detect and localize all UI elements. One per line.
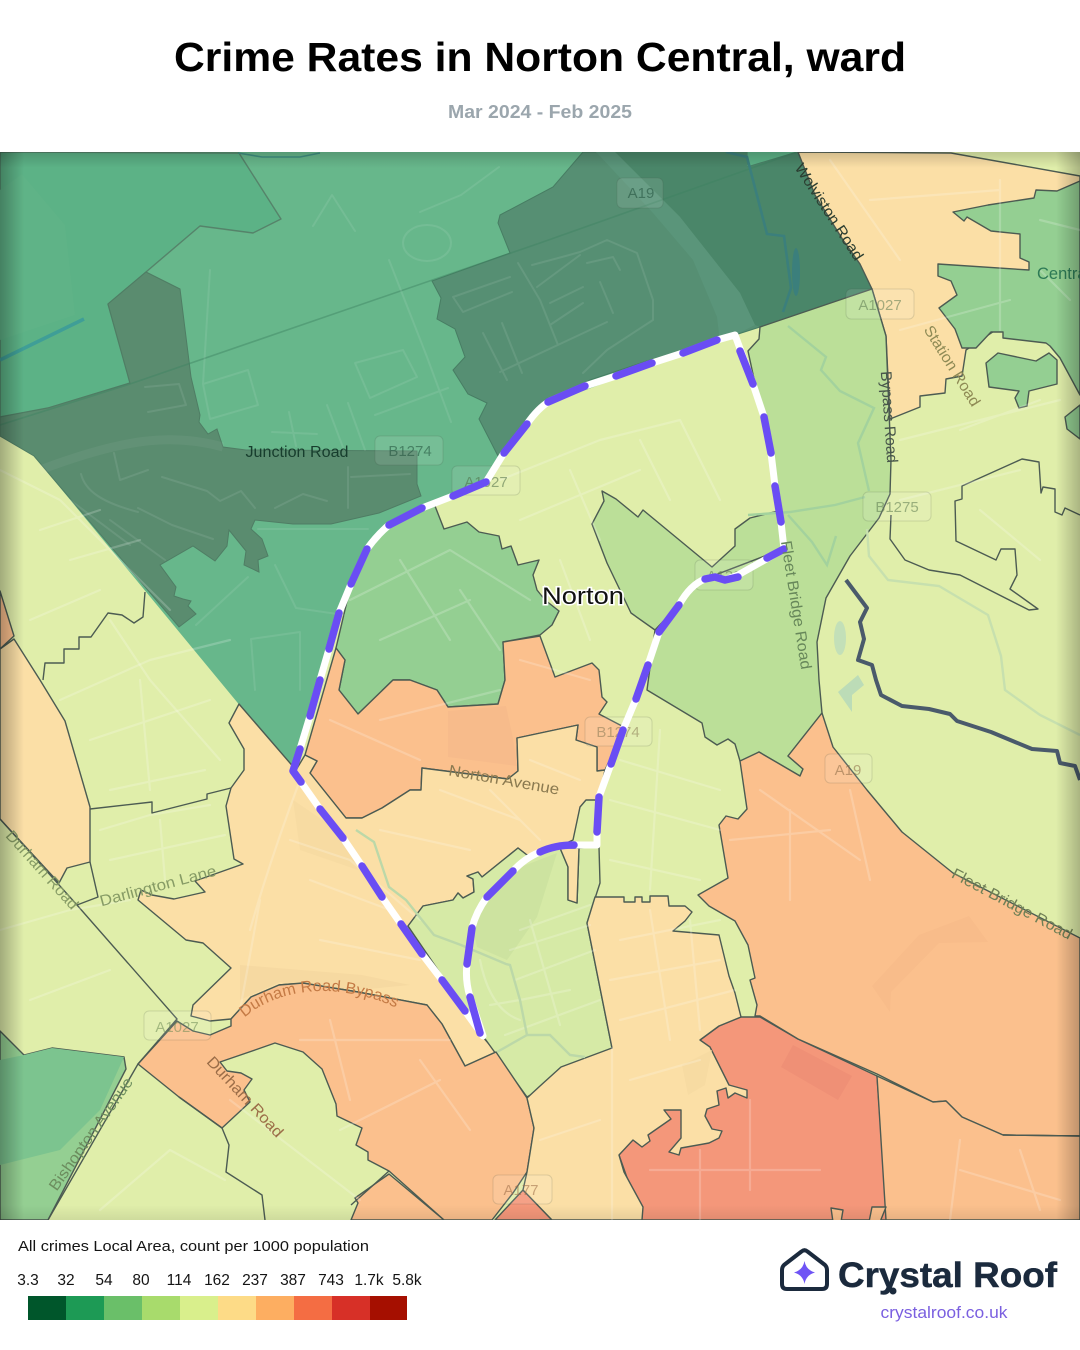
legend values: 80 bbox=[132, 1272, 150, 1289]
map edge shading bbox=[0, 152, 1080, 1220]
place label: Norton: Norton bbox=[542, 583, 624, 610]
region: pale green east of ward bbox=[647, 289, 891, 776]
legend values: 114 bbox=[167, 1272, 192, 1289]
legend colour scale bbox=[28, 1296, 407, 1320]
legend values: 387 bbox=[280, 1272, 306, 1289]
stream and pond north bbox=[0, 152, 800, 360]
legend values: 237 bbox=[242, 1272, 268, 1289]
road name labels: Bishopton Avenue bbox=[46, 1075, 137, 1194]
region: yellow west edge bbox=[0, 639, 90, 883]
road network bbox=[0, 160, 1080, 1220]
region: light green island bbox=[986, 353, 1057, 408]
region: yellow central south bbox=[138, 704, 605, 1066]
legend values: 743 bbox=[318, 1272, 344, 1289]
road name labels: Junction Road bbox=[246, 444, 348, 461]
region: light green north-east bbox=[938, 181, 1080, 395]
road shields: A1027 bbox=[464, 474, 508, 491]
legend values: 54 bbox=[95, 1272, 113, 1289]
logo wordmark: Crystal Roof bbox=[838, 1256, 1057, 1295]
red notches at map bottom bbox=[831, 1208, 843, 1222]
ward boundary: white line bbox=[293, 335, 784, 1036]
road name labels bbox=[6, 162, 1080, 1190]
region: red A177 bbox=[495, 1190, 552, 1220]
region outlines on base bbox=[0, 459, 1080, 1220]
road name labels: Wolviston Road bbox=[791, 161, 866, 264]
road name labels: Darlington Lane bbox=[98, 863, 218, 910]
region: pale green inside ward bbox=[592, 491, 783, 630]
ward boundary: purple dashes bbox=[293, 340, 784, 1033]
region: orange central ward bbox=[305, 636, 622, 818]
road shields: A19 bbox=[835, 762, 861, 779]
road name labels: Durham Road Bypass bbox=[238, 980, 398, 1016]
river bbox=[846, 580, 1080, 780]
road name labels: Station Road bbox=[920, 323, 983, 410]
road shields: A177 bbox=[503, 1182, 539, 1199]
road shields: B1275 bbox=[875, 499, 919, 516]
road name labels: Bypass Road bbox=[877, 371, 900, 464]
region: orange Durham Road Bypass bbox=[138, 983, 534, 1220]
legend title: All crimes Local Area, count per 1000 population bbox=[18, 1238, 369, 1255]
region: green north-west bbox=[22, 152, 626, 764]
region: green south-west bbox=[0, 1031, 126, 1220]
region: dark green north bbox=[432, 152, 803, 456]
region: orange south-east bbox=[698, 713, 1080, 1136]
region: green far north-west bbox=[0, 152, 281, 417]
logo descender dot bbox=[890, 1288, 896, 1294]
legend values: 162 bbox=[204, 1272, 230, 1289]
region: yellow north-east bbox=[798, 152, 1080, 419]
road shields: A19 bbox=[628, 185, 654, 202]
region: yellow south bbox=[523, 896, 747, 1220]
legend values: 3.3 bbox=[17, 1272, 39, 1289]
streams and ponds bbox=[356, 326, 1080, 1057]
region: orange west edge bbox=[0, 591, 14, 649]
legend bbox=[17, 1238, 422, 1320]
road name labels: Fleet Bridge Road bbox=[949, 865, 1075, 943]
road name labels: Durham Road bbox=[203, 1054, 286, 1141]
road shields: B1274 bbox=[596, 724, 640, 741]
yellow sliver in ward south bbox=[560, 848, 579, 903]
region: light green ward pocket bbox=[336, 505, 559, 714]
logo url: crystalroof.co.uk bbox=[880, 1304, 1008, 1322]
A19 road band bbox=[596, 152, 616, 153]
road name labels: Norton Avenue bbox=[447, 762, 561, 799]
icon: house with star bbox=[782, 1250, 827, 1289]
road shields bbox=[144, 178, 931, 1204]
title: Crime Rates in Norton Central, ward bbox=[174, 34, 906, 80]
logo: Crystal Roof bbox=[782, 1250, 1057, 1322]
road name labels: Fleet Bridge Road bbox=[777, 540, 814, 671]
legend values: 32 bbox=[57, 1272, 75, 1289]
legend values: 5.8k bbox=[392, 1272, 422, 1289]
road shields: A1027 bbox=[858, 297, 902, 314]
legend values: 1.7k bbox=[354, 1272, 384, 1289]
region: pale green ward south bbox=[408, 847, 612, 1097]
subtitle: date range: Mar 2024 - Feb 2025 bbox=[448, 102, 632, 122]
road shields: B1274 bbox=[388, 443, 432, 460]
road shields: A1027 bbox=[155, 1019, 199, 1036]
region: red south bbox=[619, 1017, 911, 1220]
choropleth map bbox=[0, 152, 1080, 1220]
road shields: A139 bbox=[706, 568, 742, 585]
region: darkest green east of A19 bbox=[615, 152, 872, 327]
legend values bbox=[17, 1272, 422, 1289]
region: dark green west bbox=[0, 272, 421, 627]
road name labels: Durham Road bbox=[2, 827, 81, 913]
